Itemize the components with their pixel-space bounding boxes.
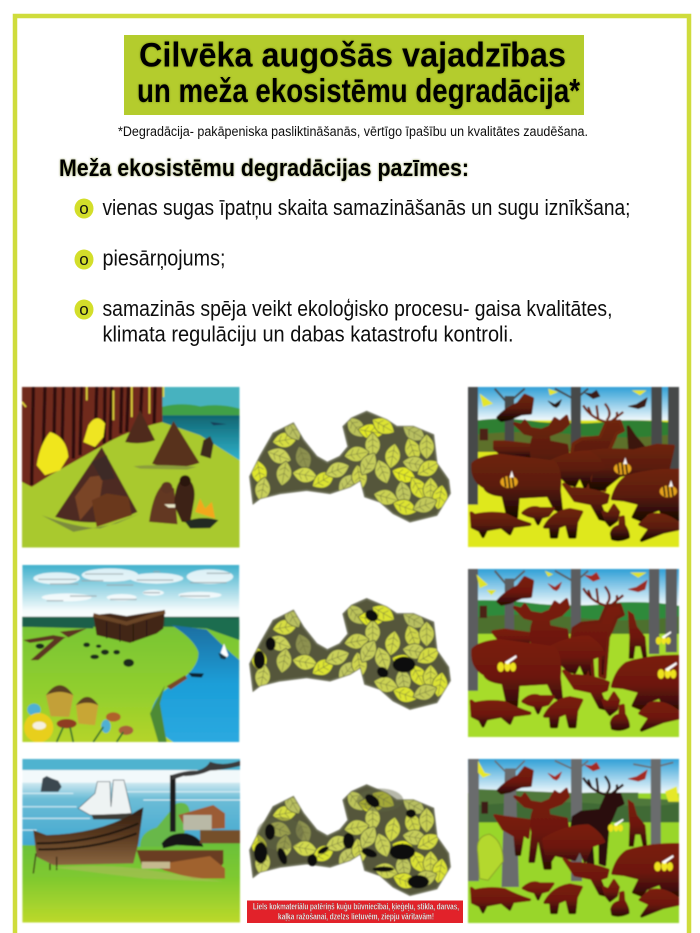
bullet 2: piesārņojums; xyxy=(102,246,226,270)
title text: Cilvēka augošās vajadzības xyxy=(139,36,566,74)
callout text: Liels kokmateriālu patēriņš kuģu būvniecībai, ķieģeļu, stikla, darvas, xyxy=(253,902,459,912)
bullet 1: o xyxy=(79,199,89,218)
bullet 3: samazinās spēja veikt ekoloģisko procesu- gaisa kvalitātes, xyxy=(102,296,612,321)
scene: animals, fewer xyxy=(468,569,679,737)
scene: early settlement xyxy=(22,387,240,548)
title text xyxy=(137,36,580,109)
bullet 3: o xyxy=(79,300,89,319)
callout text: kaļķa ražošanai, dzelzs lietuvēm, ziepju vārītavām! xyxy=(278,912,434,922)
map: forest cover, heavily cleared xyxy=(250,785,450,895)
bullet 1: vienas sugas īpatņu skaita samazināšanās un sugu iznīkšana; xyxy=(102,195,630,220)
map: forest cover, early clearings xyxy=(250,599,450,709)
footnote: *Degradācija- pakāpeniska pasliktināšanās, vērtīgo īpašību un kvalitātes zaudēšana. xyxy=(118,124,588,139)
bullet 3 xyxy=(74,296,612,346)
scene: animals, scarce xyxy=(468,759,679,923)
callout background xyxy=(247,900,463,923)
scene: animals, abundant xyxy=(468,387,679,547)
scene: shipbuilding and industry xyxy=(22,759,240,922)
scene: hillfort and river xyxy=(22,565,239,742)
heading: signs of degradation: Meža ekosistēmu degradācijas pazīmes: xyxy=(59,155,469,182)
bullet 3: klimata regulāciju un dabas katastrofu kontroli. xyxy=(102,322,514,346)
list of signs xyxy=(74,195,630,346)
map: forest cover, intact xyxy=(250,412,450,522)
title background xyxy=(124,35,584,115)
bullet 2: o xyxy=(79,250,89,269)
title block xyxy=(124,35,584,115)
callout text xyxy=(253,902,459,922)
title text: un meža ekosistēmu degradācija* xyxy=(137,72,580,109)
callout: red warning xyxy=(247,900,463,923)
